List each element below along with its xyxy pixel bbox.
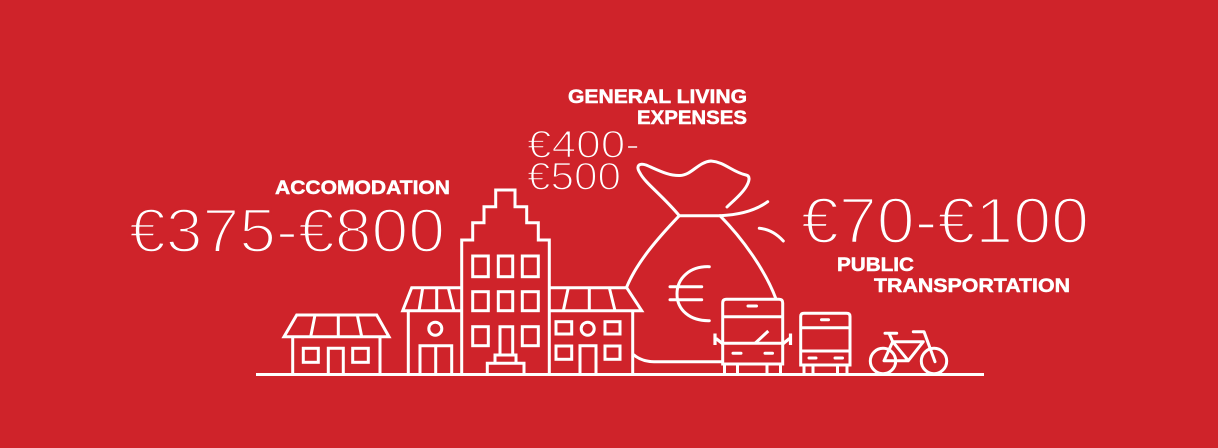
price: general living expenses: €500: [527, 156, 621, 198]
icon: money bag: [627, 161, 783, 362]
heading: public transportation: PUBLIC: [837, 255, 914, 276]
heading: accommodation: ACCOMODATION: [275, 178, 450, 199]
heading: public transportation: TRANSPORTATION: [874, 276, 1070, 297]
icon: small bus: [801, 313, 850, 374]
icon: right town house: [549, 288, 642, 374]
price: public transportation: €70-€100: [801, 184, 1089, 257]
icon: large bus: [715, 299, 790, 374]
price: general living expenses: [527, 124, 640, 198]
price: general living expenses: €400-: [527, 124, 640, 166]
icon: bicycle: [870, 332, 947, 374]
price: accommodation: €375-€800: [129, 196, 445, 266]
heading: general living expenses: GENERAL LIVING: [568, 87, 747, 108]
heading: public transportation: [837, 255, 1070, 297]
heading: general living expenses: EXPENSES: [637, 108, 747, 129]
icon: tall gabled house: [462, 190, 549, 374]
icon: left town house: [403, 288, 462, 374]
ground line: [256, 373, 984, 376]
heading: general living expenses: [568, 87, 747, 129]
icon: small house: [284, 315, 389, 374]
